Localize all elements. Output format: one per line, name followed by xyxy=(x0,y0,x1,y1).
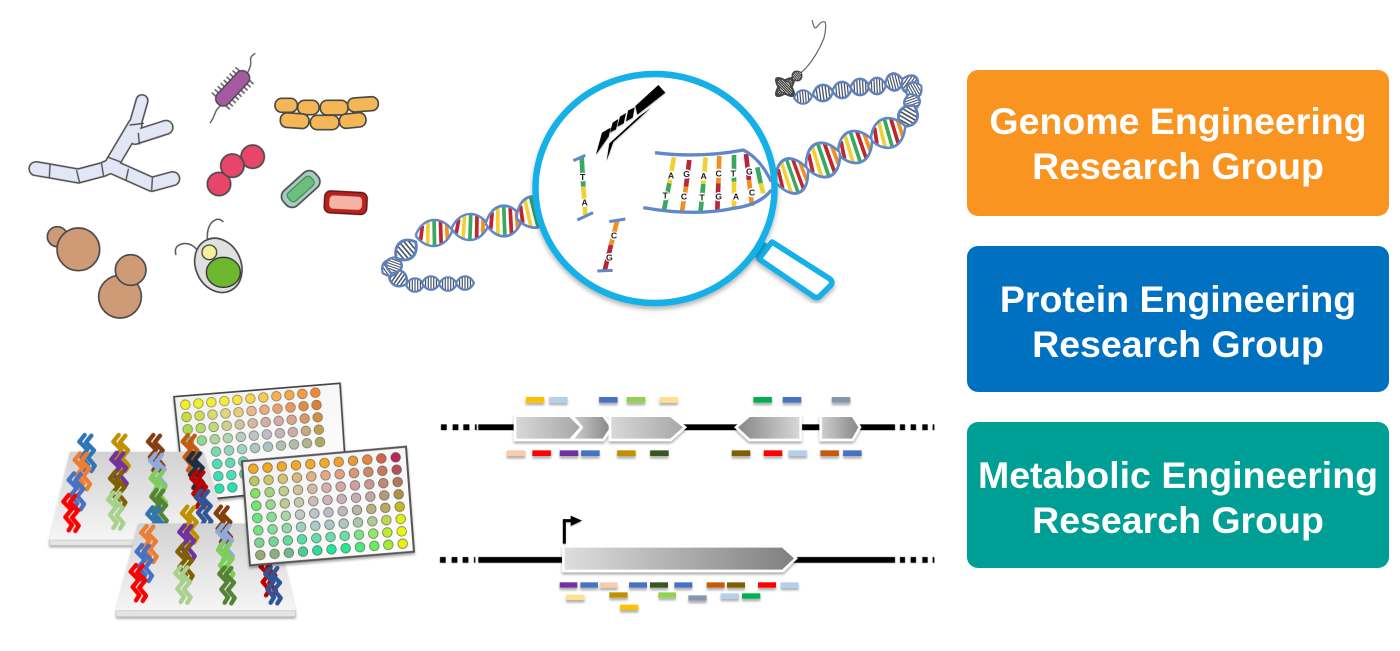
slide: front with tube strips xyxy=(116,507,296,617)
button: Genome Engineering Research Group: Research Group xyxy=(1032,145,1324,187)
double-stranded DNA close-up: A xyxy=(733,192,740,202)
button: Protein Engineering Research Group xyxy=(967,246,1389,392)
button: Protein Engineering Research Group: Research Group xyxy=(1032,323,1324,365)
DNA fragment with bases T and A: T xyxy=(580,172,586,182)
icon: red cocci chain xyxy=(207,145,264,196)
icon: magnifier handle xyxy=(752,240,832,298)
button: Protein Engineering Research Group: Protein Engineering xyxy=(1000,278,1356,320)
well plate: front xyxy=(242,447,414,565)
DNA fragment with bases T and A xyxy=(573,155,593,220)
double-stranded DNA close-up: C xyxy=(749,188,756,198)
gene track diagrams xyxy=(440,397,934,610)
well plate: back xyxy=(174,383,347,502)
double-stranded DNA close-up: G xyxy=(683,169,690,179)
DNA fragment with bases C and G xyxy=(597,219,625,271)
magnifying glass xyxy=(536,74,832,303)
slide: back with tube strips xyxy=(49,435,230,545)
double-stranded DNA close-up: G xyxy=(715,192,722,202)
button: Genome Engineering Research Group xyxy=(967,70,1389,216)
track 1 operon gene arrows xyxy=(515,416,860,440)
double-stranded DNA close-up: A xyxy=(701,171,708,181)
double-stranded DNA close-up: T xyxy=(731,168,737,178)
icon: orange rod cell chain xyxy=(275,96,379,130)
lens contents xyxy=(573,85,771,271)
double-stranded DNA close-up: G xyxy=(746,166,753,176)
double-stranded DNA close-up: T xyxy=(663,191,669,201)
icon: green alga with flagella xyxy=(175,219,251,300)
button: Metabolic Engineering Research Group: Metabolic Engineering xyxy=(978,454,1378,496)
icon: flagellated purple bacterium xyxy=(209,53,256,123)
icon: budding yeast pair xyxy=(47,227,146,318)
icon: magnifier lens xyxy=(536,74,774,303)
DNA fragment with bases C and G: C xyxy=(611,231,618,241)
double-stranded DNA close-up: A xyxy=(668,170,675,180)
icon: tweezers cutting tool xyxy=(596,85,665,161)
microbes illustration xyxy=(36,53,379,318)
track 2 sequence tags xyxy=(560,582,799,610)
button: Metabolic Engineering Research Group xyxy=(967,422,1389,568)
track 2 large gene arrow xyxy=(563,546,796,571)
double-stranded DNA close-up: C xyxy=(681,192,688,202)
DNA fragment with bases T and A: A xyxy=(582,198,589,208)
icon: branching fungus xyxy=(36,101,173,190)
double-stranded DNA close-up: C xyxy=(716,168,723,178)
button: Genome Engineering Research Group: Genome Engineering xyxy=(989,100,1367,142)
track 1 sequence tags xyxy=(507,397,862,456)
DNA helix: right strand xyxy=(769,20,925,200)
icon: green capsule cell xyxy=(278,167,323,211)
DNA helix: left strand xyxy=(378,191,557,292)
gene cluster track xyxy=(441,397,934,456)
double-stranded DNA close-up: T xyxy=(699,192,705,202)
DNA fragment with bases C and G: G xyxy=(606,252,613,262)
button: Metabolic Engineering Research Group: Research Group xyxy=(1032,499,1324,541)
single gene track xyxy=(440,516,934,610)
icon: red capsule cell xyxy=(324,191,368,215)
track 2 genome line xyxy=(440,557,934,563)
track 1 genome line xyxy=(441,424,934,430)
screening plates and tube slides xyxy=(49,383,414,617)
icon: promoter arrow xyxy=(564,516,582,544)
double-stranded DNA close-up xyxy=(643,150,771,213)
